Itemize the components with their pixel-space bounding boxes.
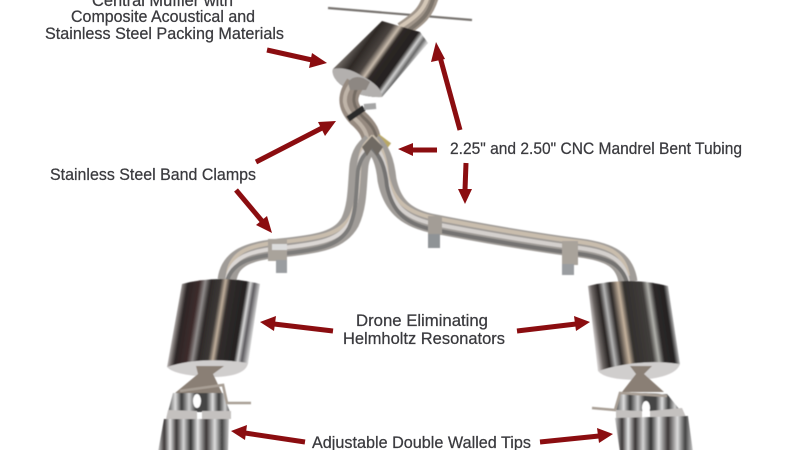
muffler outlet flange [348,77,370,90]
label: central muffler: Composite Acoustical and [71,7,255,26]
label: mandrel bent tubing: 2.25" and 2.50" CNC Mandrel Bent Tubing [450,139,742,158]
arrow: to right tips [540,428,613,443]
arrow: to inlet tubing [431,42,460,130]
arrow: to left resonator [260,316,333,331]
mid pipe [345,83,377,146]
arrow: to left band clamp [236,190,272,233]
centre band clamp [428,216,442,248]
arrow: to mid band clamp [256,121,336,162]
right resonator [588,281,680,380]
y-pipe collector [362,136,383,156]
right pipe [372,136,628,288]
arrow: to central muffler [267,50,327,68]
left pipe [226,136,373,286]
right tips [592,366,693,450]
label: band clamps: Stainless Steel Band Clamps [50,165,256,184]
left tips [158,366,251,450]
arrow: to right resonator [517,316,590,331]
left resonator [167,279,260,377]
label: helmholtz resonators: Helmholtz Resonators [343,329,505,348]
label: helmholtz resonators [343,311,505,348]
arrow: to y-pipe [398,143,437,156]
label: central muffler [45,0,284,43]
exhaust photo [158,0,693,450]
label: central muffler: Stainless Steel Packing Materials [45,24,284,43]
central muffler [333,21,428,97]
right band clamp [562,241,578,275]
arrow: to right tubing [458,163,472,204]
mid band clamp [348,106,376,119]
hanger rod [328,8,472,20]
arrow: to left tips [231,425,305,442]
left band clamp [268,239,287,273]
y-pipe clamp [377,137,389,146]
inlet pipe [400,0,434,32]
label: helmholtz resonators: Drone Eliminating [356,311,488,330]
